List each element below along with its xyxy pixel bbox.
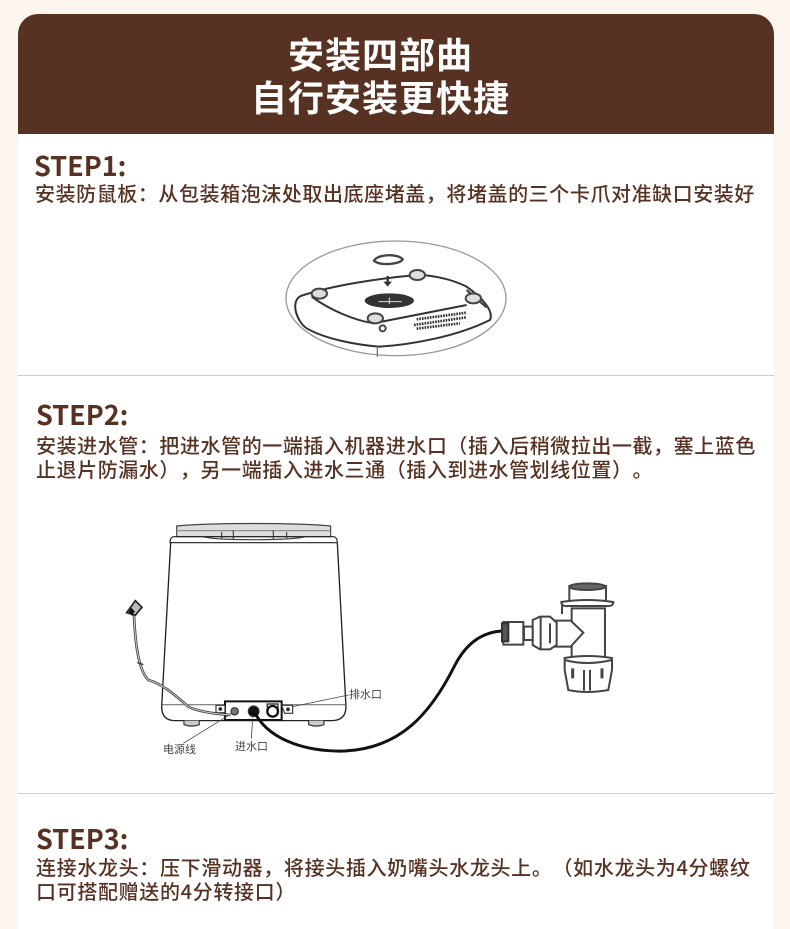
- step 3 description: 口可搭配赠送的4分转接口）: [36, 876, 296, 905]
- step 2 heading: STEP2:: [36, 394, 128, 433]
- connector panel: [225, 701, 282, 720]
- title banner: 安装四部曲: [288, 27, 473, 79]
- divider 2: [18, 793, 774, 794]
- step 3 description: 连接水龙头：压下滑动器，将接头插入奶嘴头水龙头上。（如水龙头为4分螺纹: [36, 852, 750, 881]
- divider 1: [18, 375, 774, 376]
- label: water inlet: 进水口: [235, 738, 268, 754]
- label: drain outlet: 排水口: [349, 686, 382, 702]
- illustration: anti-rodent base plate: [286, 241, 506, 357]
- title banner: [18, 14, 774, 134]
- water hose: [256, 631, 502, 751]
- power cord: [134, 616, 231, 715]
- illustration: machine rear view: [127, 523, 349, 743]
- step 1 heading: STEP1:: [34, 145, 126, 184]
- step 1 description: 安装防鼠板：从包装箱泡沫处取出底座堵盖，将堵盖的三个卡爪对准缺口安装好: [35, 178, 755, 207]
- step 3 heading: STEP3:: [36, 818, 128, 857]
- leader lines: [183, 695, 349, 743]
- step 3 description: [36, 852, 750, 905]
- illustration: three-way tee fitting: [502, 583, 613, 692]
- label: power cord: 电源线: [163, 741, 196, 757]
- step 2 description: 止退片防漏水），另一端插入进水三通（插入到进水管划线位置）。: [36, 454, 653, 483]
- step 2 description: 安装进水管：把进水管的一端插入机器进水口（插入后稍微拉出一截，塞上蓝色: [36, 430, 756, 459]
- title banner: 自行安装更快捷: [251, 70, 510, 122]
- step 2 description: [36, 430, 756, 483]
